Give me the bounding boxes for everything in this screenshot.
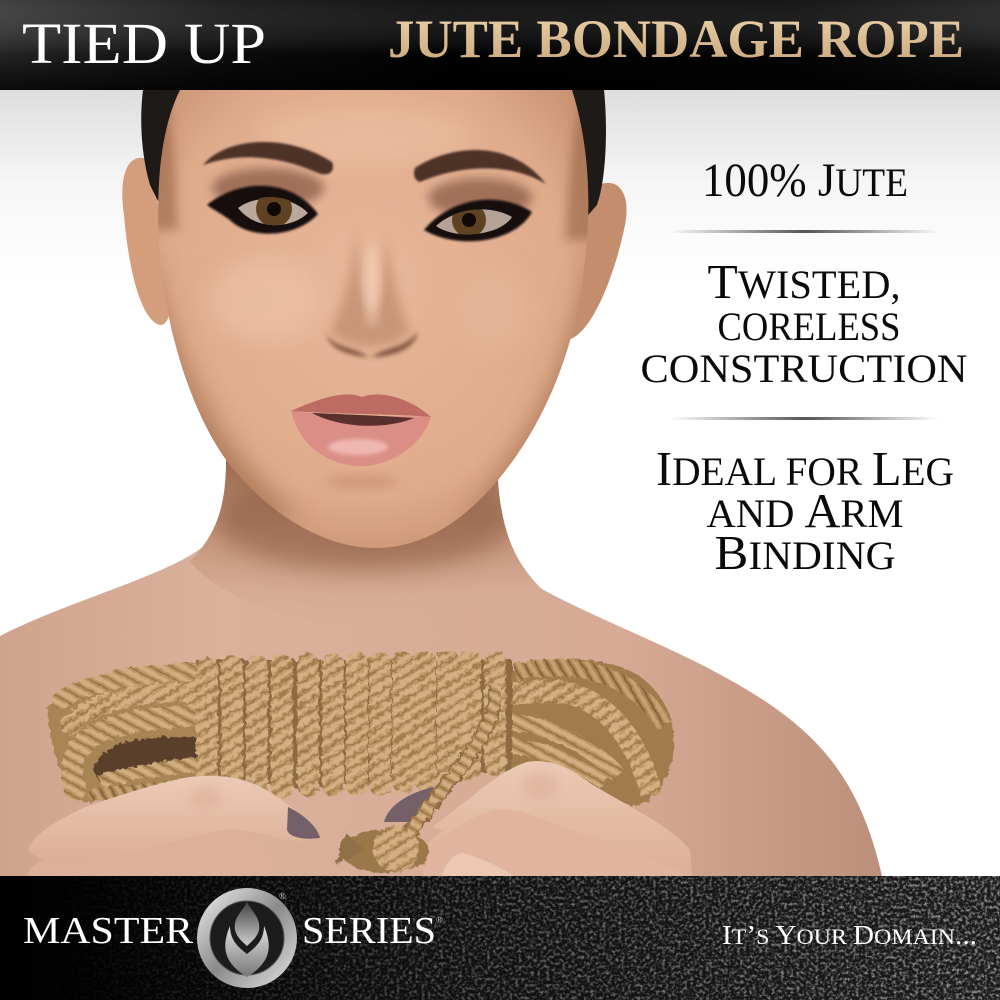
left ear	[122, 158, 171, 325]
feature: twisted coreless construction: CONSTRUCTION	[640, 346, 968, 391]
left coil hole	[93, 737, 200, 782]
face	[158, 90, 588, 548]
left hand	[28, 776, 320, 876]
header product name: JUTE BONDAGE ROPE	[388, 9, 964, 69]
hair	[141, 90, 606, 222]
feature: ideal for leg and arm binding: AND ARM	[706, 483, 904, 538]
feature list	[640, 154, 968, 580]
divider 1	[670, 230, 940, 233]
rope coil	[47, 659, 674, 806]
right eye shadow	[428, 178, 532, 218]
registered mark on series: ®	[436, 915, 443, 925]
nose highlight	[366, 243, 378, 327]
logo wordmark: series: SERIES	[302, 910, 436, 952]
nose shading	[330, 225, 410, 346]
feature: ideal for leg and arm binding: BINDING	[714, 525, 896, 580]
feature: ideal for leg and arm binding	[656, 441, 954, 580]
lips	[291, 394, 431, 466]
feature: ideal for leg and arm binding: IDEAL FOR LEG	[656, 441, 954, 496]
left coil strands	[60, 672, 205, 795]
left eye	[207, 186, 318, 234]
dangling rope end	[408, 685, 496, 835]
divider 2	[670, 417, 940, 420]
right knuckle shading	[522, 771, 558, 799]
logo wordmark: master: MASTER	[23, 910, 194, 952]
right second finger	[423, 809, 692, 876]
right coil strands	[510, 667, 665, 795]
face soft modelling	[158, 108, 588, 521]
right third finger	[442, 853, 514, 876]
rope knot	[336, 826, 429, 873]
tagline: IT’S YOUR DOMAIN...	[722, 920, 977, 950]
model photo illustration	[0, 90, 882, 876]
logo emblem	[197, 888, 297, 988]
feature: 100% jute: 100% JUTE	[702, 154, 908, 207]
left coil lower strand	[100, 764, 202, 782]
rope strands with fuzzy edge	[47, 659, 674, 806]
right fingers	[420, 761, 692, 876]
background gradient panel	[0, 90, 1000, 280]
right ear	[558, 183, 627, 340]
shoulders and chest	[0, 545, 882, 876]
right coil	[500, 659, 674, 806]
right eye	[424, 200, 532, 241]
left nail	[287, 807, 320, 839]
right hand	[384, 761, 692, 876]
central wraps	[196, 660, 512, 788]
header bar	[0, 0, 1000, 90]
feature: twisted coreless construction: CORELESS	[718, 304, 900, 349]
registered mark on emblem: ®	[279, 891, 286, 901]
left coil	[47, 662, 215, 803]
feature: twisted coreless construction: TWISTED,	[708, 254, 900, 309]
under-chin shadow	[215, 470, 515, 570]
right nail	[384, 787, 434, 822]
neck	[190, 450, 545, 629]
header brand: TIED UP	[22, 11, 266, 76]
left index finger	[28, 776, 320, 863]
footer bar	[0, 876, 1000, 1000]
lower left finger	[28, 827, 274, 876]
nose underside	[326, 332, 418, 358]
chin shadow	[326, 475, 398, 489]
left eye shadow	[212, 168, 324, 208]
feature: twisted coreless construction	[640, 254, 968, 391]
left knuckle shading	[189, 785, 221, 809]
left eyebrow	[203, 142, 333, 174]
right eyebrow	[414, 150, 546, 184]
